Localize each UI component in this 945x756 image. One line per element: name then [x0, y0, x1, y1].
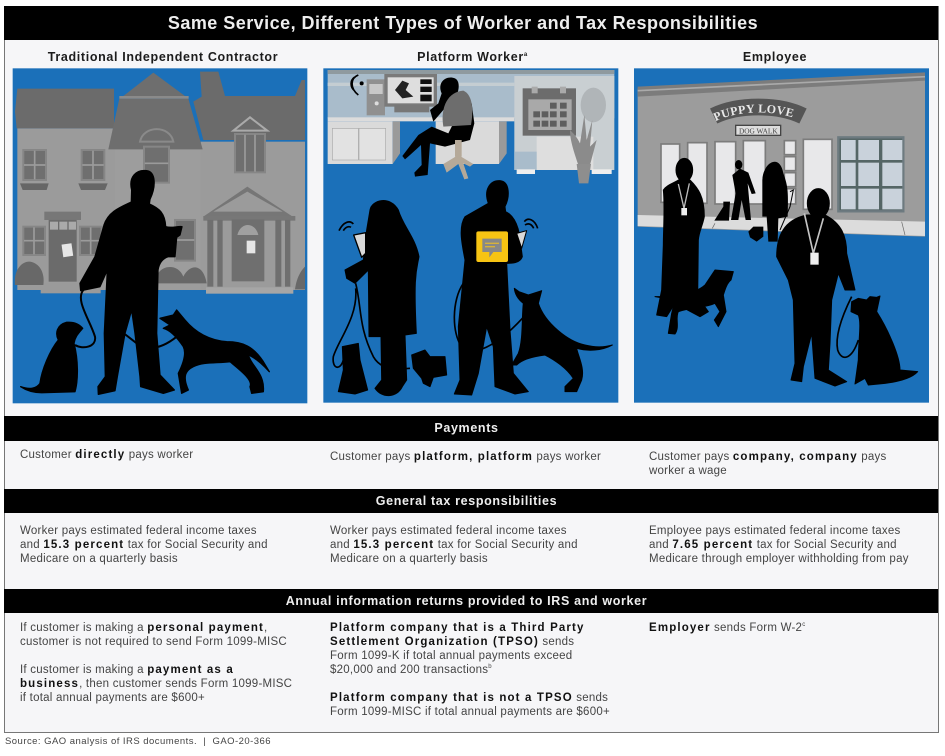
text: payments, platform: Customer pays platform, platform pays worker — [330, 451, 601, 463]
text: payments, contractor: Customer directly pays worker — [20, 449, 193, 461]
foreground employee left — [655, 158, 733, 334]
houses — [15, 72, 305, 294]
porch — [203, 187, 293, 217]
door left — [44, 212, 81, 220]
storefront — [638, 72, 925, 237]
text: returns, platform: Platform company that is a Third Party — [330, 622, 585, 634]
woman silhouette — [333, 201, 447, 396]
foreground employee right — [777, 189, 918, 386]
man silhouette — [21, 171, 269, 394]
text: returns, contractor — [20, 622, 292, 704]
calendar — [523, 87, 576, 136]
storefront: PUPPY LOVE — [712, 104, 794, 122]
text: returns, platform — [330, 622, 610, 718]
text: returns, contractor: if total annual payments are $600+ — [20, 692, 205, 704]
text: tax, employee — [649, 525, 909, 565]
text: tax, contractor — [20, 525, 268, 565]
illustration: employees with dogs at company storefront — [634, 68, 929, 403]
text: tax, contractor: and 15.3 percent tax for Social Security and — [20, 539, 268, 551]
text: returns, contractor: customer is not required to send Form 1099-MISC — [20, 636, 287, 648]
section header: annual information returns — [4, 589, 938, 613]
text: tax, platform: Worker pays estimated federal income taxes — [330, 525, 567, 537]
text: payments, employee — [649, 451, 886, 477]
icon: yellow message app — [476, 231, 508, 262]
computer — [367, 79, 385, 115]
shrubs and steps — [41, 283, 101, 293]
text: returns, platform: $20,000 and 200 transactionsb — [330, 664, 492, 676]
background employees — [714, 160, 793, 242]
section header: general tax responsibilities — [4, 489, 938, 513]
illustration: independent contractor with dogs at houses — [13, 68, 307, 403]
text: tax, contractor: Medicare on a quarterly basis — [20, 553, 178, 565]
text: tax, contractor: Worker pays estimated federal income taxes — [20, 525, 257, 537]
text: tax, employee: and 7.65 percent tax for Social Security and — [649, 539, 897, 551]
title — [4, 6, 938, 40]
section header: general tax responsibilities: General tax responsibilities — [376, 494, 557, 508]
right cubicle — [514, 76, 614, 170]
source note: Source: GAO analysis of IRS documents. | GAO-20-366 — [5, 736, 271, 747]
text: tax, platform: Medicare on a quarterly basis — [330, 553, 488, 565]
text: tax, employee: Employee pays estimated federal income taxes — [649, 525, 901, 537]
text: returns, platform: Platform company that is not a TPSO sends — [330, 692, 608, 704]
shop windows — [661, 139, 832, 209]
text: returns, contractor: If customer is making a personal payment, — [20, 622, 267, 634]
text: returns, employee: Employer sends Form W-2c — [649, 622, 805, 634]
storefront: DOG WALK — [739, 126, 778, 135]
text: tax, platform — [330, 525, 578, 565]
text: returns, platform: Form 1099-K if total annual payments exceed — [330, 650, 572, 662]
section header: payments: Payments — [434, 421, 499, 435]
text: returns, contractor: If customer is making a payment as a — [20, 664, 234, 676]
section header: payments — [4, 416, 938, 441]
door hangers — [62, 243, 73, 257]
title: Same Service, Different Types of Worker and Tax Responsibilities — [168, 13, 758, 33]
text: returns, platform: Form 1099-MISC if total annual payments are $600+ — [330, 706, 610, 718]
text: payments, employee: Customer pays company, company pays — [649, 451, 886, 463]
shop sign — [714, 107, 803, 116]
illustration: platform workers with dogs and office — [323, 68, 618, 403]
text: payments, employee: worker a wage — [649, 465, 727, 477]
office worker — [430, 77, 459, 122]
section header: annual information returns: Annual information returns provided to IRS and worker — [286, 594, 647, 608]
windows — [23, 134, 265, 261]
heading: traditional independent contractor: Traditional Independent Contractor — [48, 50, 278, 64]
text: returns, contractor: business, then customer sends Form 1099-MISC — [20, 678, 292, 690]
text: returns, platform: Settlement Organization (TPSO) sends — [330, 636, 574, 648]
heading: platform worker: Platform Workera — [417, 50, 528, 64]
text: tax, platform: and 15.3 percent tax for Social Security and — [330, 539, 578, 551]
office — [328, 70, 614, 183]
left cabinet — [328, 117, 514, 121]
text: tax, employee: Medicare through employer withholding from pay — [649, 553, 909, 565]
plant — [570, 115, 597, 165]
heading: employee: Employee — [743, 50, 807, 64]
man with phone silhouette — [454, 181, 612, 395]
